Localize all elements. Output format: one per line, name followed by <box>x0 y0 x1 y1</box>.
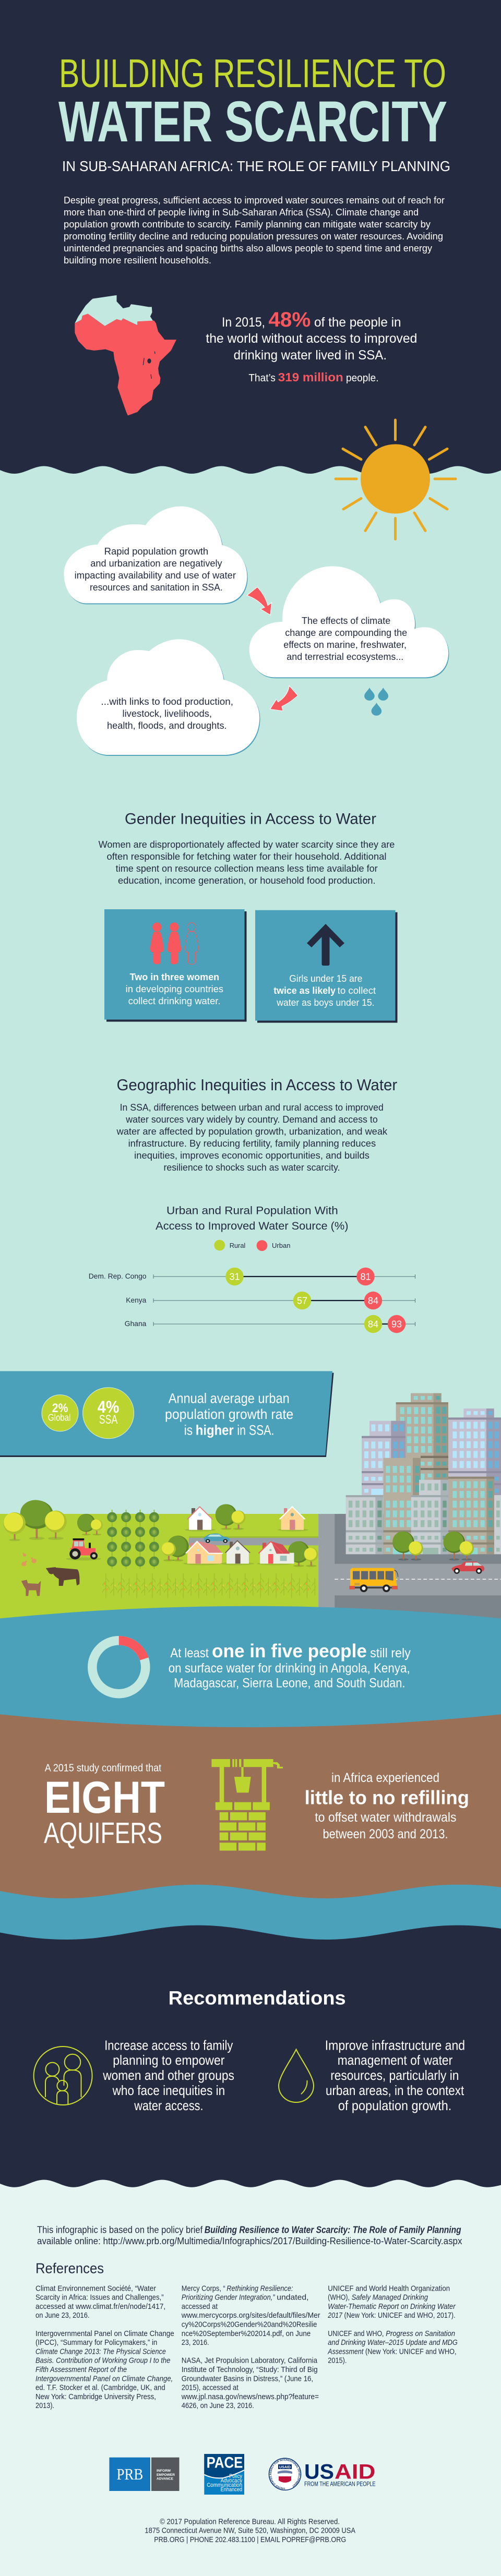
row: Ghana: 93 <box>391 1319 402 1329</box>
geographic paragraph: resilience to shocks such as water scarcity. <box>164 1162 340 1173</box>
text: eight aquifers: A 2015 study confirmed that <box>45 1763 162 1774</box>
references column 1: accessed at www.climat.fr/en/node/1417, <box>35 2303 165 2311</box>
goat <box>21 1580 41 1596</box>
logo: PRB: INFORM <box>157 2469 171 2473</box>
references column 3 <box>327 2284 458 2365</box>
chart: urban and rural access <box>89 1205 415 1333</box>
references column 1: Climat Environnement Société, “Water <box>35 2284 156 2293</box>
source note: available online: http://www.prb.org/Multimedia/Infographics/2017/Building-Resilience-to-Water-Scarcity.aspx <box>37 2236 462 2246</box>
recommendation text: family planning <box>102 2037 234 2113</box>
red car <box>451 1561 484 1574</box>
cloud: climate change: The effects of climate <box>302 616 390 626</box>
legend: Rural <box>230 1242 245 1249</box>
logo: USAID: US <box>304 2460 334 2483</box>
card: girls under 15: water as boys under 15. <box>276 997 375 1008</box>
background: mint panel <box>0 459 501 1628</box>
corn rows <box>102 1572 316 1599</box>
circle: 2 percent global: Global <box>48 1413 70 1423</box>
cloud: climate change: and terrestrial ecosystems... <box>287 652 403 662</box>
cloud: population growth: Rapid population growth <box>104 546 208 557</box>
gender paragraph: education, income generation, or household food production. <box>118 875 376 886</box>
intro paragraph: building more resilient households. <box>64 255 211 266</box>
logo: PACE: Communication <box>207 2482 242 2488</box>
text: one in five people: At least <box>170 1646 209 1660</box>
recommendation text: infrastructure: Improve infrastructure and <box>325 2037 465 2053</box>
chart title: Urban and Rural Population With <box>166 1205 338 1217</box>
text: one in five people: one in five people <box>212 1640 367 1662</box>
card: two in three women <box>104 909 246 1021</box>
icon: up arrow <box>307 924 344 966</box>
cloud: food and livelihoods <box>77 639 260 756</box>
title: IN SUB-SAHARAN AFRICA: THE ROLE OF FAMILY PLANNING <box>62 158 450 174</box>
cloud: climate change <box>249 566 449 678</box>
card: two in three women: in developing countries <box>126 984 223 994</box>
logo: USAID: AID <box>335 2460 375 2483</box>
circle: 2 percent global: 2% <box>52 1401 68 1415</box>
text: one in five people: still rely <box>370 1646 411 1660</box>
car: blue <box>204 1534 230 1543</box>
banner text <box>165 1391 293 1438</box>
recommendation text: infrastructure: urban areas, in the context <box>326 2083 464 2098</box>
city trees <box>392 1532 474 1560</box>
icon: family in circle <box>34 2047 92 2105</box>
text: one in five people: Madagascar, Sierra Leone, and South Sudan. <box>174 1676 405 1690</box>
row: Dem. Rep. Congo: 31 <box>229 1272 240 1282</box>
building: back brown tower <box>396 1393 448 1480</box>
card: girls under 15: Girls under 15 are <box>289 973 362 984</box>
geographic paragraph: inequities, improves economic opportunities, and builds <box>134 1150 369 1161</box>
building: far right block <box>494 1495 501 1554</box>
references column 3: (WHO), <box>328 2294 350 2302</box>
references column 1: (IPCC), “Summary for Policymakers,” in <box>35 2339 157 2347</box>
cloud: population growth <box>64 507 248 604</box>
text: eight aquifers <box>44 1763 165 1850</box>
references column 1: Intergovernmental Panel on Climate Change <box>35 2330 174 2338</box>
references column 1: Fifth Assessment Report of the <box>35 2366 127 2374</box>
house: peach large <box>183 1541 223 1565</box>
recommendation text: family planning: women and other groups <box>102 2067 234 2083</box>
statistic: 48 percent: 48% <box>268 308 311 331</box>
banner text: Annual average urban <box>169 1391 290 1406</box>
references column 3: 2017 <box>327 2312 343 2320</box>
illustration: city <box>324 1393 501 1635</box>
references column 1: New York: Cambridge University Press, <box>35 2393 156 2401</box>
references column 3: Assessment <box>327 2348 364 2356</box>
references column 3: 2015). <box>328 2357 347 2365</box>
background: brown aquifer panel <box>0 1706 501 1904</box>
references column 2: NASA, Jet Propulsion Laboratory, California <box>182 2357 318 2365</box>
geographic paragraph <box>116 1102 388 1173</box>
statistic: 48 percent <box>206 308 417 384</box>
background: navy recommendations panel <box>0 1925 501 2187</box>
building: left grey block <box>346 1495 383 1554</box>
chart title <box>156 1205 349 1232</box>
card: girls under 15 <box>255 910 398 1022</box>
card: two in three women: Two in three women <box>130 972 219 982</box>
statistic: 48 percent: the world without access to improved <box>206 331 417 346</box>
streets <box>324 1514 501 1635</box>
heading: references: References <box>35 2260 104 2277</box>
recommendation text: family planning: planning to empower <box>113 2052 225 2068</box>
chart: donut one in five <box>92 1641 146 1694</box>
building: left lilac tower <box>362 1421 405 1496</box>
references column 3: (New York: UNICEF and WHO, 2017). <box>344 2312 456 2320</box>
banner text: is <box>184 1423 193 1438</box>
references column 3: Water-Thematic Report on Drinking Water <box>328 2303 456 2311</box>
heading: recommendations: Recommendations <box>169 1988 346 2008</box>
statistic: 48 percent: In 2015, <box>222 315 265 330</box>
references column 1: Scarcity in Africa: Issues and Challenges,” <box>35 2294 164 2302</box>
circle: 2 percent global <box>42 1395 78 1431</box>
references column 1 <box>35 2284 174 2410</box>
source note: This infographic is based on the policy brief <box>37 2225 203 2235</box>
background: teal band under aquifers <box>0 1885 501 1946</box>
tractor <box>66 1538 101 1560</box>
references column 2: undated, <box>277 2294 309 2302</box>
building: right brown tower <box>448 1477 494 1554</box>
row: Dem. Rep. Congo <box>89 1268 415 1285</box>
card: girls under 15: to collect <box>338 985 376 996</box>
references column 2: Prioritizing Gender Integration,” <box>182 2294 276 2302</box>
recommendation text: family planning: Increase access to family <box>104 2037 233 2053</box>
geographic paragraph: water are affected by population growth, urbanization, and weak <box>116 1126 388 1137</box>
logo: USAID: UNITED STATES AGENCY FOR INTERNATIONAL DEVELOPMENT <box>269 2459 301 2489</box>
intro paragraph <box>64 195 445 266</box>
text: eight aquifers: EIGHT <box>44 1773 165 1823</box>
logo: PRB: EMPOWER <box>157 2473 175 2477</box>
references column 2: Mercy Corps, “ <box>182 2284 225 2293</box>
text: little to no refilling: little to no refilling <box>305 1787 469 1809</box>
card: girls under 15: twice as likely <box>273 985 336 996</box>
map of Africa <box>75 295 176 416</box>
logo: USAID: USAID <box>279 2464 291 2470</box>
logo: USAID: FROM THE AMERICAN PEOPLE <box>304 2482 376 2488</box>
circle: 4 percent SSA <box>83 1388 134 1439</box>
icon: three women <box>150 922 199 964</box>
row: Ghana: 84 <box>368 1319 378 1329</box>
background: footer light panel <box>0 2175 501 2576</box>
row: Kenya: 57 <box>297 1296 307 1306</box>
title <box>58 51 450 174</box>
references column 1: Basis. Contribution of Working Group I to the <box>35 2357 170 2365</box>
text: eight aquifers: AQUIFERS <box>44 1816 162 1850</box>
references column 1: Intergovernmental Panel on Climate Change, <box>35 2375 173 2383</box>
yellow bus <box>349 1568 398 1592</box>
references column 2 <box>181 2284 320 2410</box>
logo: PRB <box>109 2458 180 2491</box>
intro paragraph: population growth contribute to scarcity. Family planning can mitigate water scarcity by <box>64 219 431 230</box>
text: little to no refilling: to offset water withdrawals <box>315 1810 456 1825</box>
references column 2: www.mercycorps.org/sites/default/files/Mer <box>181 2312 320 2320</box>
statistic: 48 percent: 319 million <box>278 370 343 384</box>
logo: PRB: ADVANCE <box>157 2477 174 2481</box>
text: little to no refilling: in Africa experienced <box>331 1771 439 1785</box>
references column 2: Institute of Technology, “Study: Third of Big <box>182 2366 318 2374</box>
recommendation text: family planning: water access. <box>134 2098 204 2113</box>
logo: PACE: Enhanced <box>221 2487 242 2493</box>
heading: gender inequities: Gender Inequities in Access to Water <box>125 811 376 827</box>
cloud: food and livelihoods: livestock, livelihoods, <box>122 708 212 719</box>
references column 3: UNICEF and World Health Organization <box>328 2284 450 2293</box>
references column 2: cy%20Corps%20Gender%20and%20Resilie <box>182 2320 317 2329</box>
row: Ghana <box>125 1315 415 1333</box>
gender paragraph: often responsible for fetching water for their household. Additional <box>106 851 386 862</box>
building: centre brown tower <box>384 1458 421 1554</box>
recommendation text: infrastructure <box>325 2037 465 2113</box>
building: right lilac tower <box>448 1409 501 1496</box>
logo: USAID <box>268 2458 376 2490</box>
row: Kenya: 84 <box>368 1296 378 1306</box>
cloud: population growth: impacting availability and use of water <box>75 570 236 581</box>
row: Kenya <box>126 1292 415 1309</box>
geographic paragraph: infrastructure. By reducing fertility, family planning reduces <box>128 1138 376 1149</box>
circle: 4 percent SSA: 4% <box>98 1398 119 1416</box>
icon: water well <box>211 1759 283 1850</box>
cow <box>46 1567 79 1586</box>
house: cream with brown roof <box>220 1540 254 1565</box>
icon: water drop outline <box>279 2050 314 2102</box>
banner text: in SSA. <box>237 1423 274 1438</box>
recommendation text: infrastructure: resources, particularly in <box>330 2067 459 2083</box>
logo: PACE: PACE <box>207 2454 243 2472</box>
row: Ghana: Ghana <box>125 1319 147 1328</box>
gender paragraph: time spent on resource collection means less time available for <box>116 863 378 874</box>
copyright and contact: 1875 Connecticut Avenue NW, Suite 520, Washington, DC 20009 USA <box>145 2527 355 2535</box>
logo: PACE: Advocacy <box>221 2478 243 2484</box>
gender paragraph: Women are disproportionately affected by water scarcity since they are <box>99 839 395 850</box>
cloud: food and livelihoods: ...with links to food production, <box>101 696 233 707</box>
text: little to no refilling <box>305 1771 469 1841</box>
references column 1: on June 23, 2016. <box>35 2312 90 2320</box>
statistic: 48 percent: drinking water lived in SSA. <box>234 348 387 363</box>
references column 2: 2015), accessed at <box>182 2384 238 2392</box>
references column 1: ed. T.F. Stocker et al. (Cambridge, UK, and <box>35 2384 165 2392</box>
banner text: higher <box>196 1423 234 1438</box>
text: one in five people <box>169 1640 411 1690</box>
cabbage rows <box>105 1510 161 1569</box>
logo: PACE <box>204 2454 244 2495</box>
intro paragraph: promoting fertility decline and reducing population pressures on water resources. Avoiding <box>64 231 443 242</box>
chart title: Access to Improved Water Source (%) <box>156 1220 349 1232</box>
icon: sun <box>336 420 456 539</box>
chickens <box>21 1552 37 1566</box>
illustration: rural landscape <box>0 1500 325 1629</box>
references column 2: www.jpl.nasa.gov/news/news.php?feature= <box>181 2393 319 2401</box>
references column 1: Climate Change 2013: The Physical Science <box>35 2348 166 2356</box>
trees <box>3 1500 318 1567</box>
references column 2: 4626, on June 23, 2016. <box>182 2402 254 2410</box>
references column 2: nce%20September%202014.pdf, on June <box>182 2330 311 2338</box>
references column 3: Safely Managed Drinking <box>352 2294 428 2302</box>
legend <box>214 1240 290 1251</box>
statistic: 48 percent: That’s <box>248 372 276 384</box>
source note: Building Resilience to Water Scarcity: The Role of Family Planning <box>205 2225 461 2235</box>
geographic paragraph: In SSA, differences between urban and rural access to improved <box>120 1102 384 1113</box>
geographic paragraph: water sources vary widely by country. Demand and access to <box>125 1114 378 1125</box>
references column 2: Groundwater Basins in Distress,” (June 16, <box>182 2375 313 2383</box>
house: cream with red roof <box>257 1542 294 1565</box>
copyright and contact <box>145 2518 355 2544</box>
row: Dem. Rep. Congo: 81 <box>360 1272 371 1282</box>
intro paragraph: Despite great progress, sufficient access to improved water sources remains out of reach for <box>64 195 445 206</box>
recommendation text: infrastructure: of population growth. <box>338 2098 451 2113</box>
banner: urban growth rate <box>0 1371 334 1457</box>
recommendation text: infrastructure: management of water <box>338 2052 452 2068</box>
row: Kenya: Kenya <box>126 1296 147 1304</box>
heading: geographic inequities: Geographic Inequities in Access to Water <box>117 1076 397 1094</box>
legend: Urban <box>272 1242 290 1249</box>
house: white with pink roof <box>185 1506 216 1532</box>
cloud: climate change: change are compounding the <box>285 628 407 638</box>
background: teal surface water panel <box>0 1606 501 1727</box>
intro paragraph: more than one-third of people living in Sub-Saharan Africa (SSA). Climate change and <box>64 207 419 218</box>
building: centre grey block <box>411 1480 448 1554</box>
cloud: climate change: effects on marine, freshwater, <box>283 640 407 650</box>
recommendation text: family planning: who face inequities in <box>112 2083 225 2098</box>
copyright and contact: © 2017 Population Reference Bureau. All Rights Reserved. <box>160 2518 340 2526</box>
references column 2: 23, 2016. <box>182 2339 209 2347</box>
text: one in five people: on surface water for drinking in Angola, Kenya, <box>169 1661 410 1676</box>
references column 3: Progress on Sanitation <box>386 2330 455 2338</box>
references column 3: (New York: UNICEF and WHO, <box>365 2348 456 2356</box>
text: little to no refilling: between 2003 and 2013. <box>323 1827 448 1841</box>
background: top navy panel <box>0 0 501 474</box>
source note <box>37 2225 462 2246</box>
logo: PRB: PRB <box>117 2465 143 2483</box>
cloud: population growth: and urbanization are negatively <box>90 558 222 569</box>
circle: 4 percent SSA: SSA <box>99 1413 117 1427</box>
references column 2: accessed at <box>182 2303 218 2311</box>
references column 3: and Drinking Water–2015 Update and MDG <box>328 2339 458 2347</box>
references column 3: UNICEF and WHO, <box>328 2330 384 2338</box>
row: Dem. Rep. Congo: Dem. Rep. Congo <box>89 1272 147 1280</box>
house: peach with white roof <box>278 1506 308 1532</box>
intro paragraph: unintended pregnancies and spacing births also allows people to spend time and energy <box>64 243 432 254</box>
references column 1: 2013). <box>35 2402 54 2410</box>
banner text: population growth rate <box>165 1406 293 1422</box>
cloud: population growth: resources and sanitation in SSA. <box>90 582 223 593</box>
cloud: food and livelihoods: health, floods, and droughts. <box>107 720 227 731</box>
copyright and contact: PRB.ORG | PHONE 202.483.1100 | EMAIL POPREF@PRB.ORG <box>154 2536 346 2544</box>
statistic: 48 percent: people. <box>346 372 379 384</box>
arrows and rain drops between clouds <box>247 587 388 716</box>
statistic: 48 percent: of the people in <box>314 315 401 330</box>
references column 2: Rethinking Resilience: <box>226 2284 293 2293</box>
logo: PACE: Policy <box>229 2473 243 2479</box>
card: two in three women: collect drinking water. <box>128 996 221 1006</box>
gender paragraph <box>99 839 395 886</box>
